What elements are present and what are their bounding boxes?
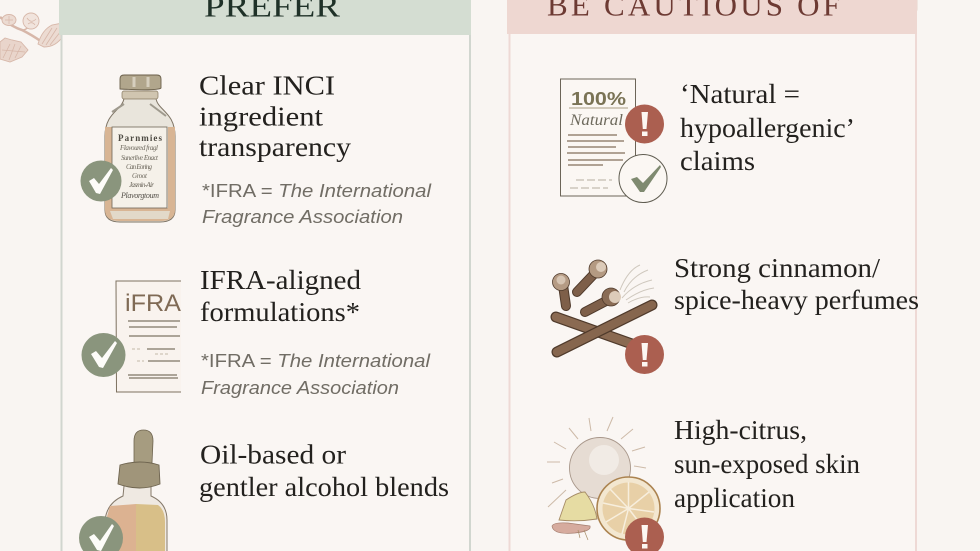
text: natural claims: claims [680,146,755,176]
icon: dropper bottle [79,430,167,551]
heading band [507,0,917,34]
icon: cinnamon and cloves [552,260,664,374]
panel: be cautious of [507,0,919,551]
heading band [59,0,471,35]
text: citrus: sun-exposed skin [674,449,860,479]
floral decoration top right [910,0,917,10]
text: citrus: application [674,483,795,513]
text: clear inci: ingredient [199,102,324,132]
icon: ingredient bottle: Can Eoring [126,163,152,171]
text: ifra-aligned [200,265,362,327]
panel: prefer [59,0,471,551]
text: ifra-aligned: formulations* [200,297,360,327]
icon: ingredient bottle [80,75,175,222]
floral decoration top left [0,13,63,62]
text: cinnamon: spice-heavy perfumes [674,285,919,315]
text: oil-based: Oil-based or [200,440,346,470]
icon: ingredient bottle: Sunerlive Enact [121,154,159,162]
text: ifra-aligned: IFRA-aligned [200,265,362,295]
note: ifra definition [202,180,432,227]
icon: alert badge [625,518,664,551]
icon: alert badge [625,104,664,144]
text: cinnamon: Strong cinnamon/ [674,253,881,283]
icon: natural claim document [560,79,667,202]
icon: ingredient bottle: Groot [132,172,148,180]
text: citrus: High-citrus, [674,415,807,445]
icon: alert badge [625,335,664,374]
icon: ingredient bottle: Plavorgtoum [120,191,159,200]
icon: sun and citrus [547,417,664,551]
icon: natural claim document: 100% [571,89,626,109]
note: ifra definition: *IFRA = The International [202,180,432,201]
panel body [62,30,470,551]
text: clear inci: Clear INCI [199,70,335,100]
text: clear inci: transparency [199,132,352,162]
text: oil-based [199,440,449,502]
text: citrus [674,415,860,513]
icon: ifra document [82,281,181,392]
text: natural claims: hypoallergenic’ [680,113,855,143]
text: oil-based: gentler alcohol blends [199,472,449,502]
icon: ingredient bottle: Jasmin-Air [129,181,154,189]
text: natural claims: ‘Natural = [680,79,800,109]
icon: ingredient bottle: Parnmies [118,133,162,143]
icon: check badge [82,333,126,377]
note: ifra definition [201,350,431,398]
icon: check outline badge [619,154,667,202]
icon: ifra document: iFRA [125,290,181,317]
text: natural claims [680,79,855,176]
note: ifra definition: Fragrance Association [201,377,399,398]
text: clear inci [199,70,352,162]
icon: ingredient bottle: Flavoured fragl [119,144,158,152]
icon: natural claim document: Natural [569,112,624,129]
panel body [510,30,916,551]
note: ifra definition: Fragrance Association [202,206,403,227]
text: cinnamon [674,253,919,315]
note: ifra definition: *IFRA = The International [201,350,431,371]
icon: check badge [79,516,123,551]
icon: check badge [80,160,122,202]
